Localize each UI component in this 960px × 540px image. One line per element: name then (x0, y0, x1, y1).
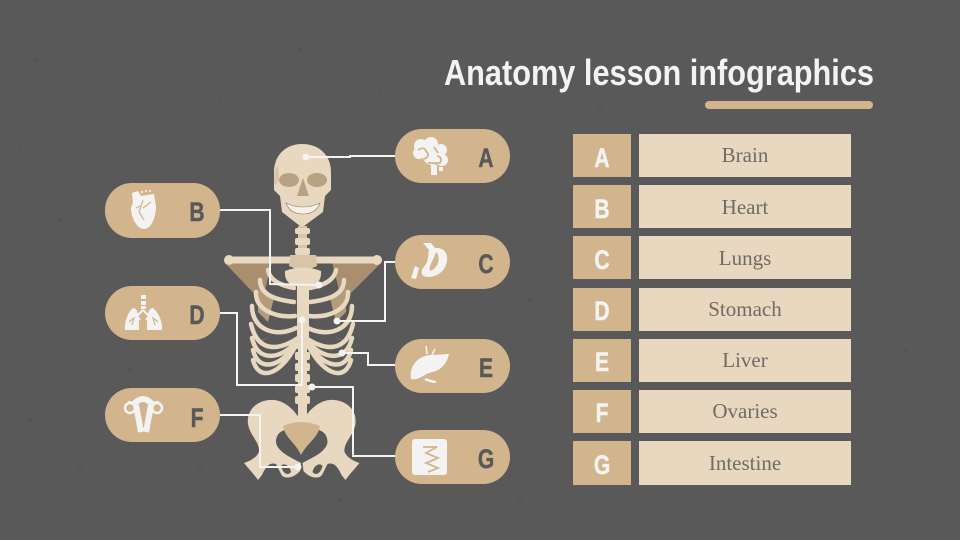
line E (338, 350, 395, 365)
row B (573, 185, 851, 228)
icon: intestine (412, 439, 447, 475)
icon: brain (413, 137, 448, 175)
row B: Heart (722, 195, 768, 219)
icon: lungs (125, 295, 162, 330)
row D: Stomach (708, 297, 782, 321)
pill G: intestine (395, 430, 510, 484)
icon: heart (131, 190, 156, 229)
row F: Ovaries (712, 399, 778, 423)
connector lines (220, 154, 395, 470)
row C (573, 236, 851, 279)
skeleton (224, 144, 382, 480)
row E (573, 339, 851, 382)
letter B: B (189, 198, 205, 228)
row B: B (594, 195, 610, 225)
icon: stomach (411, 243, 447, 279)
key table (573, 134, 851, 485)
row D (573, 288, 851, 331)
title underline (705, 101, 873, 109)
letter A: A (478, 144, 494, 174)
shoulder blades (224, 262, 382, 302)
skull (274, 144, 331, 226)
pelvis (244, 400, 360, 480)
letter F: F (191, 404, 203, 434)
clavicles (229, 256, 377, 264)
letter G: G (478, 445, 494, 475)
rib cage (251, 270, 353, 373)
pill D: lungs (105, 286, 220, 340)
icon: ovaries (125, 399, 162, 432)
row D: D (594, 297, 610, 327)
row F (573, 390, 851, 433)
line B (220, 210, 322, 288)
row A: Brain (722, 143, 769, 167)
neck vertebrae (295, 226, 310, 256)
title: Anatomy lesson infographics (444, 52, 874, 93)
sternum (285, 255, 321, 342)
line G (308, 384, 395, 456)
row A: A (594, 144, 610, 174)
row C: Lungs (719, 246, 771, 270)
row G: Intestine (709, 451, 781, 475)
row G: G (594, 451, 610, 481)
row A (573, 134, 851, 177)
letter D: D (189, 301, 205, 331)
pill A: brain (395, 129, 510, 183)
row G (573, 441, 851, 485)
line A (302, 154, 395, 160)
letter C: C (478, 250, 494, 280)
pill F: ovaries (105, 388, 220, 442)
line D (220, 313, 306, 385)
row E: E (595, 348, 609, 378)
row E: Liver (722, 348, 768, 372)
letter E: E (479, 354, 493, 384)
spine (295, 340, 310, 432)
pill E: liver (395, 339, 510, 393)
icon: liver (411, 346, 449, 383)
row C: C (594, 246, 610, 276)
line F (220, 415, 302, 470)
row F: F (596, 399, 608, 429)
line C (334, 262, 395, 324)
pill C: stomach (395, 235, 510, 289)
pill B: heart (105, 183, 220, 238)
